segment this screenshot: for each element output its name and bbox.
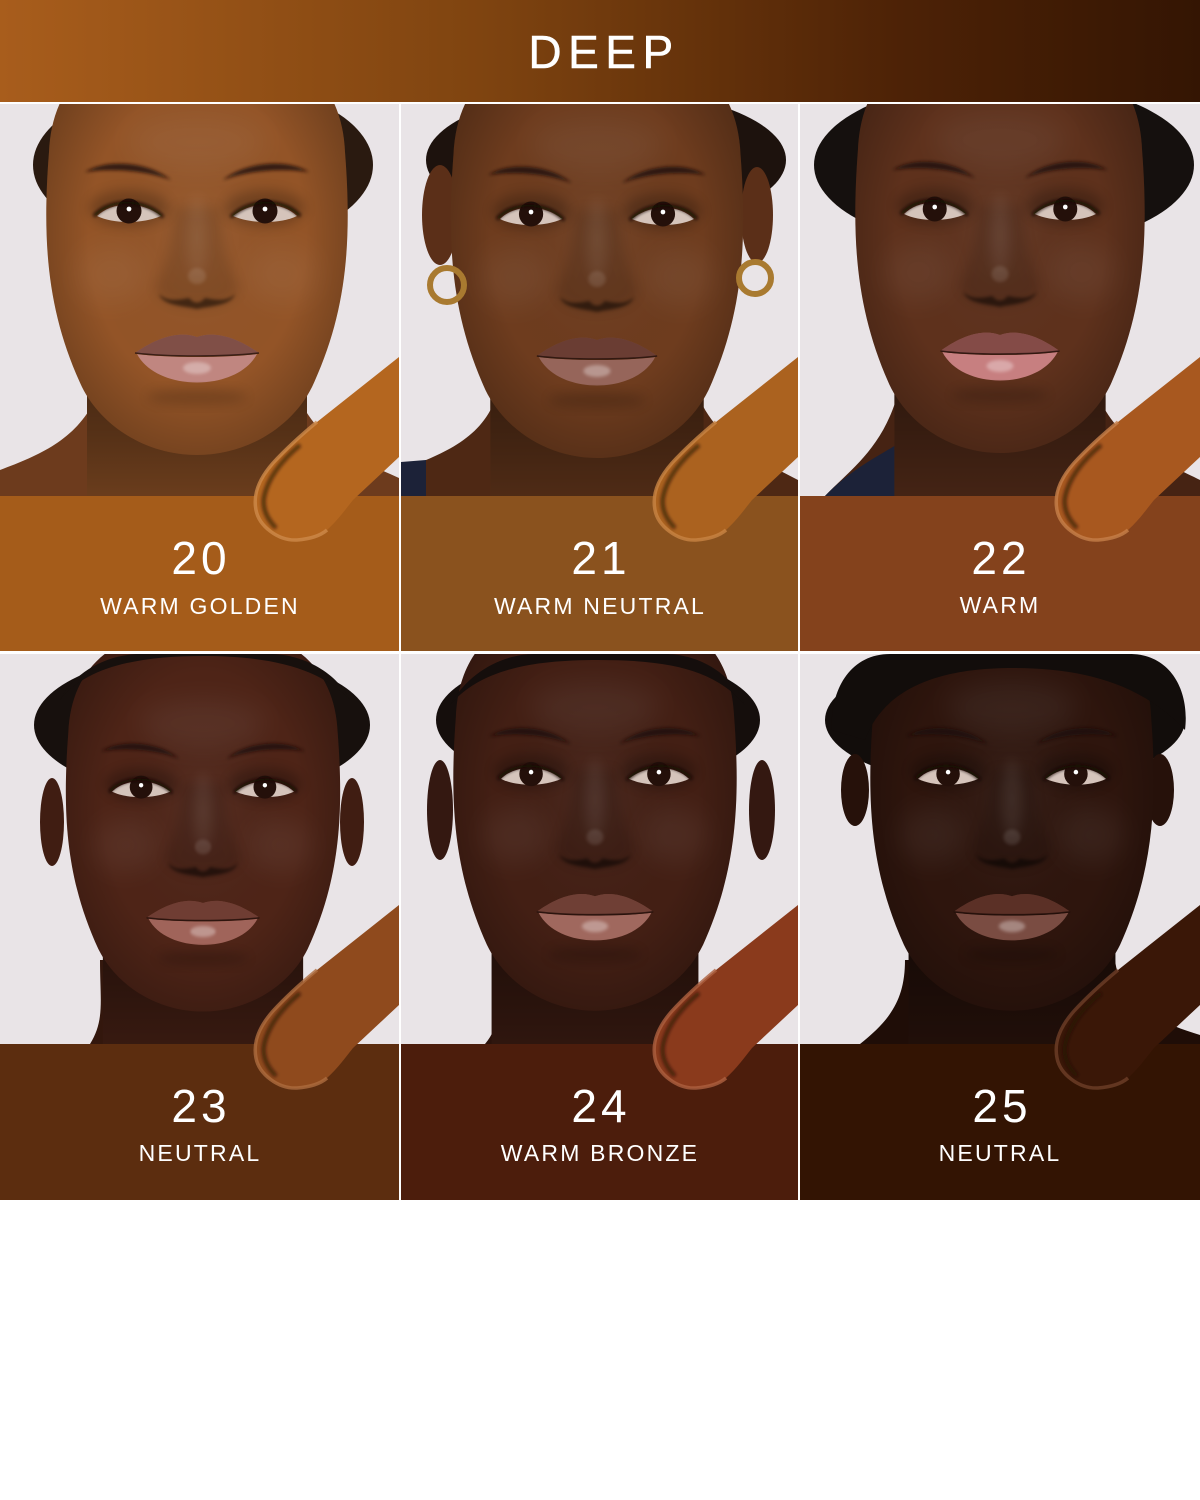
shade number: 21 bbox=[571, 532, 631, 584]
shade name: WARM GOLDEN bbox=[100, 593, 300, 619]
shade number: 20 bbox=[171, 532, 231, 584]
swatch bbox=[1056, 905, 1200, 1088]
shade name: WARM bbox=[960, 592, 1040, 618]
swatch bbox=[1056, 357, 1200, 540]
shade name: WARM NEUTRAL bbox=[494, 593, 706, 619]
panel: shade 21 bbox=[401, 40, 798, 651]
panel: shade 20 bbox=[0, 37, 399, 651]
shade number: 22 bbox=[971, 532, 1031, 584]
shade name: NEUTRAL bbox=[939, 1140, 1061, 1166]
swatch bbox=[255, 905, 399, 1088]
icon: earrings bbox=[430, 262, 771, 302]
shade name: WARM BRONZE bbox=[501, 1140, 699, 1166]
shade number: 23 bbox=[171, 1080, 231, 1132]
panel: shade 23 bbox=[0, 627, 399, 1200]
hairline bbox=[60, 654, 350, 700]
swatch bbox=[654, 905, 798, 1088]
hairline bbox=[832, 654, 1186, 740]
header banner bbox=[0, 0, 1200, 102]
hairline bbox=[450, 654, 745, 705]
shade name: NEUTRAL bbox=[139, 1140, 261, 1166]
swatch bbox=[654, 357, 798, 540]
shade number: 25 bbox=[972, 1080, 1032, 1132]
heading: DEEP: DEEP bbox=[528, 26, 680, 78]
swatch bbox=[255, 357, 399, 540]
panel: shade 24 bbox=[401, 605, 798, 1200]
shade number: 24 bbox=[571, 1080, 631, 1132]
panel: shade 25 bbox=[800, 605, 1200, 1200]
panel: shade 22 bbox=[800, 35, 1200, 651]
